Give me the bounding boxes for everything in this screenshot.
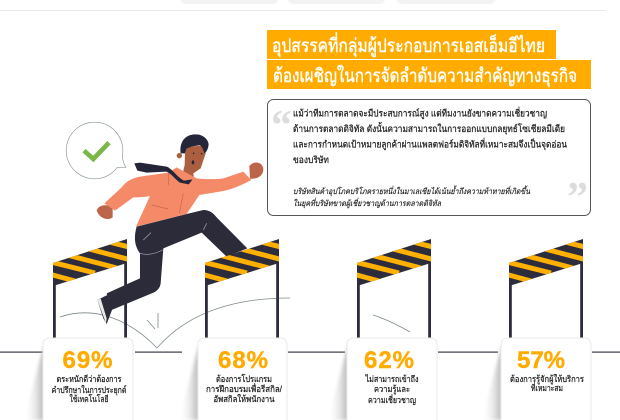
description: [365, 374, 418, 405]
quote body: และการกำหนดเป้าหมายลูกค้าผ่านแพลตฟอร์มดิจิทัลที่เหมาะสมจึงเป็นจุดอ่อน: [293, 138, 567, 150]
description: [206, 374, 282, 404]
character jumping hurdle: [97, 134, 263, 324]
description: ต้องการโปรแกรม: [216, 374, 272, 384]
description: การฝึกอบรมเพื่อรีสกิล/: [206, 383, 282, 394]
close quote mark: ”: [567, 175, 588, 221]
icon: green check: [84, 143, 109, 159]
title: [267, 30, 591, 89]
description: ตระหนักดีว่าต้องการ: [56, 374, 122, 384]
top navigation pills: [180, 0, 495, 4]
quote source: บริษัทสินค้าอุปโภคบริโภครายหนึ่งในมาเลเซียได้เน้นย้ำถึงความท้าทายที่เกิดขึ้น: [293, 185, 530, 197]
description: ใช้เทคโนโลยี: [70, 394, 108, 404]
hurdle 2: [199, 239, 285, 341]
shoe: [97, 295, 112, 324]
description: ต้องการรู้จักผู้ให้บริการ: [510, 374, 584, 385]
quote source: ในยุคที่บริษัทขาดผู้เชี่ยวชาญด้านการตลาดดิจิทัล: [293, 197, 442, 209]
shirt and trouser details: [140, 173, 207, 254]
speech bubble with check mark: [66, 122, 126, 179]
tie: [134, 163, 193, 184]
description: [52, 374, 127, 404]
description: ไม่สามารถเข้าถึง: [365, 374, 418, 384]
ear: [177, 153, 182, 158]
jump motion lines: [60, 298, 410, 348]
quote body: ด้านการตลาดดิจิทัล ดังนั้นความสามารถในการออกแบบกลยุทธ์โซเชียลมีเดีย: [293, 122, 565, 135]
description: อัพสกิลให้พนักงาน: [214, 394, 274, 404]
description: ความรู้และ: [374, 384, 410, 395]
hurdle 4: [503, 239, 589, 341]
shirt: [104, 167, 251, 227]
percentage: 57%: [517, 347, 565, 374]
neck and face: [183, 145, 206, 178]
left fist: [97, 205, 113, 219]
percentage: 68%: [218, 347, 268, 374]
card 4: [482, 338, 591, 420]
right fist: [249, 163, 263, 179]
trousers: [107, 210, 247, 310]
card 1: [24, 338, 133, 420]
quote source: [293, 185, 530, 209]
quote body: [293, 106, 567, 166]
hurdle 3: [351, 239, 437, 341]
description: ที่เหมาะสม: [531, 382, 563, 393]
description: [510, 374, 584, 393]
card 3: [328, 338, 437, 420]
quote box: [268, 100, 590, 221]
hurdle 1: [47, 239, 133, 341]
eyes and mouth: [192, 152, 202, 164]
quote body: ของบริษัท: [293, 155, 329, 166]
card 2: [179, 338, 287, 420]
open quote mark: “: [271, 103, 292, 149]
quote body: แม้ว่าทีมการตลาดจะมีประสบการณ์สูง แต่ทีมงานยังขาดความเชี่ยวชาญ: [293, 106, 547, 120]
hair: [180, 134, 209, 153]
percentage: 62%: [364, 347, 414, 374]
ground line: [0, 352, 620, 353]
title: อุปสรรคที่กลุ่มผู้ประกอบการเอสเอ็มอีไทย: [272, 32, 545, 58]
description: ความเชี่ยวชาญ: [368, 394, 416, 405]
description: คำปรึกษาในการประยุกต์: [52, 385, 127, 396]
percentage: 69%: [62, 347, 112, 374]
